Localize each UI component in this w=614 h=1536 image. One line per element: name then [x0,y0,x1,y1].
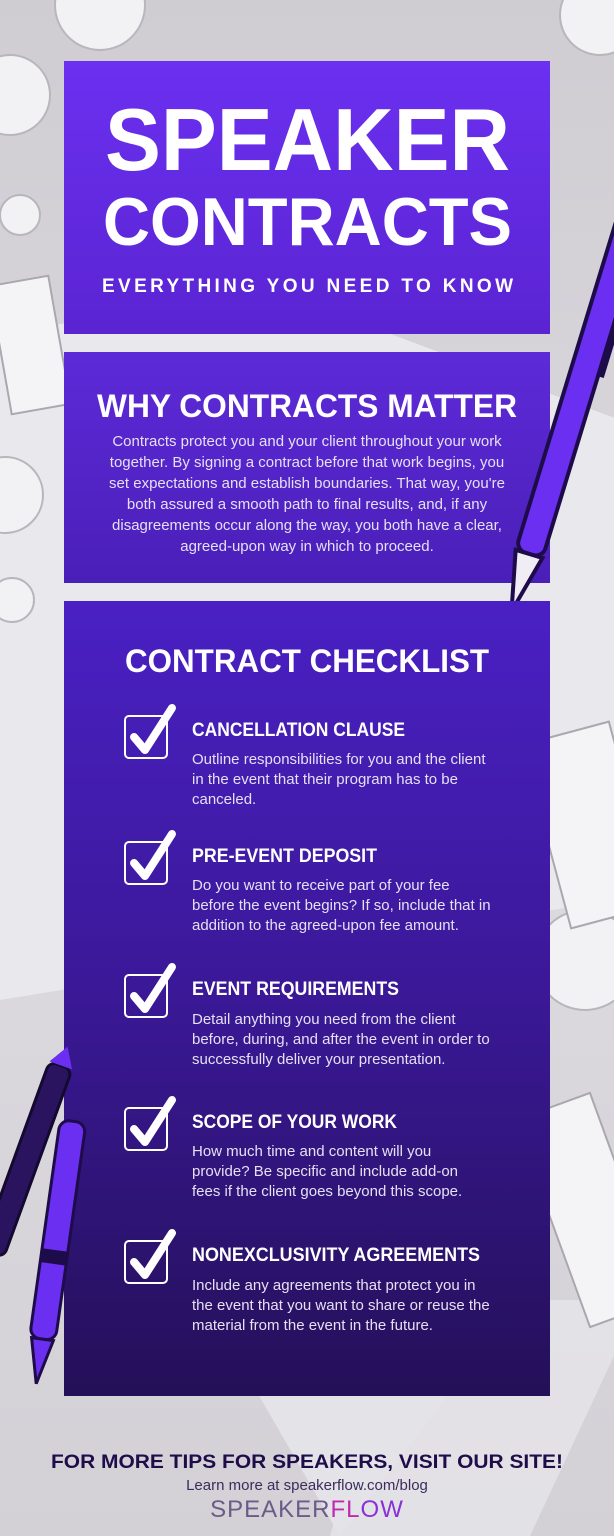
panel: title [64,61,550,334]
item: scope of your work: How much time and content will you [192,1143,431,1160]
item: scope of your work [125,1100,462,1200]
item: cancellation clause: canceled. [192,791,256,808]
logo: speakerflow: SPEAKERFLOW [210,1496,404,1523]
paragraph: together. By signing a contract before that work begins, you [110,454,504,471]
paragraph: disagreements occur along the way, you both have a clear, [112,517,502,534]
item: event requirements: before, during, and after the event in order to [192,1031,490,1048]
subtitle: EVERYTHING YOU NEED TO KNOW [102,276,513,297]
panel: why contracts matter [64,352,550,583]
item: pre-event deposit: Do you want to receive part of your fee [192,877,450,894]
paragraph: both assured a smooth path to final results, and, if any [127,496,488,513]
item: pre-event deposit: addition to the agreed-upon fee amount. [192,917,459,934]
icon: pens left [0,1043,86,1385]
heading: CONTRACT CHECKLIST [125,643,489,679]
paragraph: Contracts protect you and your client throughout your work [112,433,502,450]
decorative bills [0,276,614,1327]
footer link: Learn more at speakerflow.com/blog [186,1477,428,1494]
item: event requirements: successfully deliver your presentation. [192,1051,445,1068]
title: contracts: CONTRACTS [103,184,512,260]
item: pre-event deposit [125,834,491,934]
item: nonexclusivity agreements: material from the event in the future. [192,1317,433,1334]
item: scope of your work: fees if the client goes beyond this scope. [192,1183,462,1200]
title: speaker: SPEAKER [105,90,510,189]
item: cancellation clause: Outline responsibilities for you and the client [192,751,486,768]
item: cancellation clause: CANCELLATION CLAUSE [192,720,405,741]
decorative coins [0,0,614,1010]
item: event requirements [125,967,490,1068]
panel: contract checklist [64,601,550,1396]
footer cta: FOR MORE TIPS FOR SPEAKERS, VISIT OUR SITE! [51,1452,563,1473]
heading: WHY CONTRACTS MATTER [97,388,517,424]
item: pre-event deposit: PRE-EVENT DEPOSIT [192,846,377,867]
item: nonexclusivity agreements: NONEXCLUSIVITY AGREEMENTS [192,1245,480,1266]
paragraph: set expectations and establish boundaries. That way, you're [109,475,505,492]
item: event requirements: Detail anything you need from the client [192,1011,456,1028]
item: event requirements: EVENT REQUIREMENTS [192,979,399,1000]
item: pre-event deposit: before the event begins? If so, include that in [192,897,491,914]
item: nonexclusivity agreements: Include any agreements that protect you in [192,1277,476,1294]
icon: pen right [498,206,614,617]
item: nonexclusivity agreements: the event that you want to share or reuse the [192,1297,490,1314]
paragraph [109,433,505,555]
item: scope of your work: provide? Be specific and include add-on [192,1163,458,1180]
item: scope of your work: SCOPE OF YOUR WORK [192,1112,397,1133]
item: cancellation clause [125,708,486,808]
item: cancellation clause: in the event that their program has to be [192,771,458,788]
item: nonexclusivity agreements [125,1233,490,1334]
paragraph: agreed-upon way in which to proceed. [180,538,434,555]
